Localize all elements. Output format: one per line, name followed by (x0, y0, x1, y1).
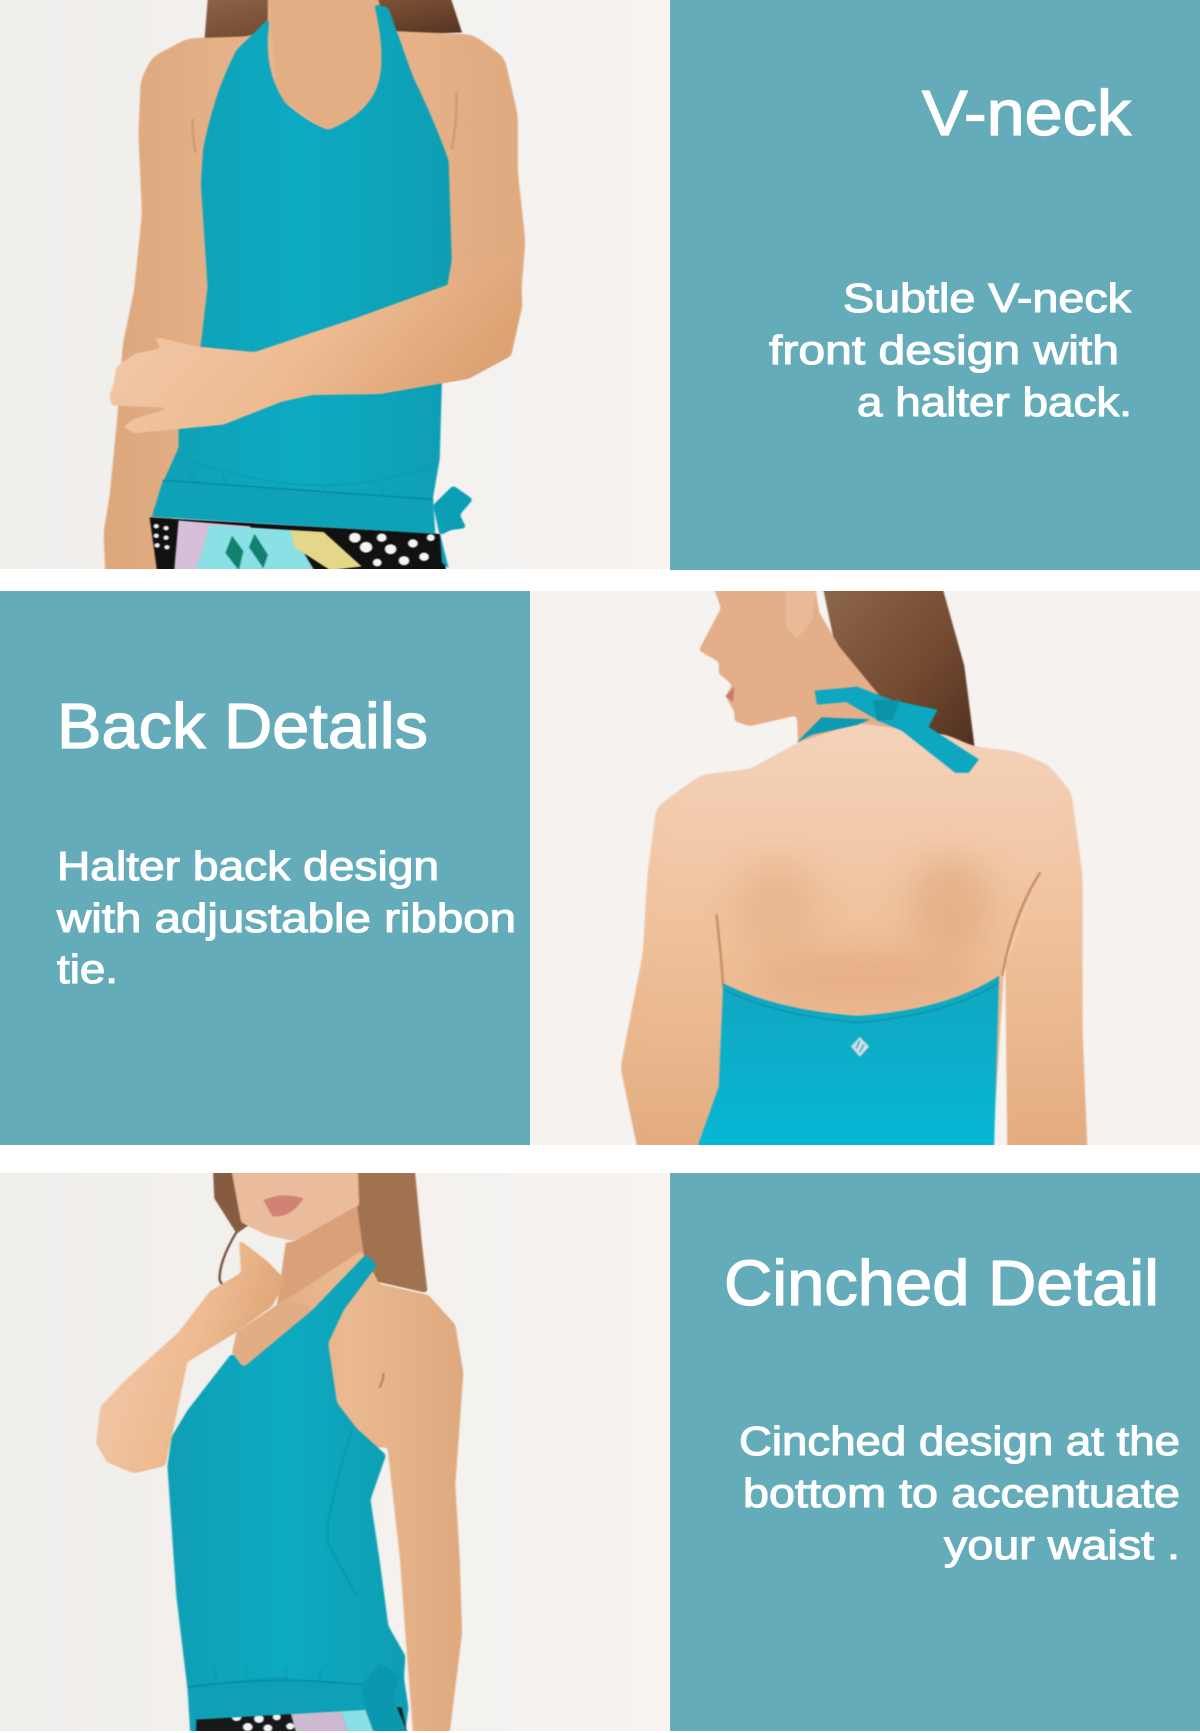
teal text block (670, 0, 1200, 570)
body text: back description: tie. (57, 946, 118, 992)
body text: back description: Halter back design (57, 843, 439, 889)
body text: cinched description: your waist . (944, 1522, 1180, 1568)
body text: cinched description (739, 1418, 1180, 1568)
body text: V-neck description: Subtle V-neck (843, 275, 1132, 321)
body text: back description (56, 843, 516, 992)
teal text block (0, 591, 530, 1145)
body text: V-neck description: a halter back. (857, 379, 1132, 425)
heading: V-neck: V-neck (922, 77, 1132, 149)
heading: Back Details: Back Details (57, 690, 428, 762)
panel: back details (0, 570, 1200, 1175)
body text: V-neck description (769, 275, 1132, 425)
heading: Cinched Detail: Cinched Detail (724, 1247, 1159, 1319)
body text: back description: with adjustable ribbon (56, 895, 516, 941)
photo: front of halter top (0, 0, 670, 597)
panel: v-neck (0, 0, 1200, 597)
teal text block (670, 1173, 1200, 1731)
body text: V-neck description: front design with (769, 327, 1119, 373)
photo: side of halter top (0, 1150, 670, 1733)
body text: cinched description: bottom to accentuate (743, 1470, 1180, 1516)
panel: cinched detail (0, 1150, 1200, 1733)
body text: cinched description: Cinched design at the (739, 1418, 1180, 1464)
photo: back of halter top (530, 570, 1200, 1175)
